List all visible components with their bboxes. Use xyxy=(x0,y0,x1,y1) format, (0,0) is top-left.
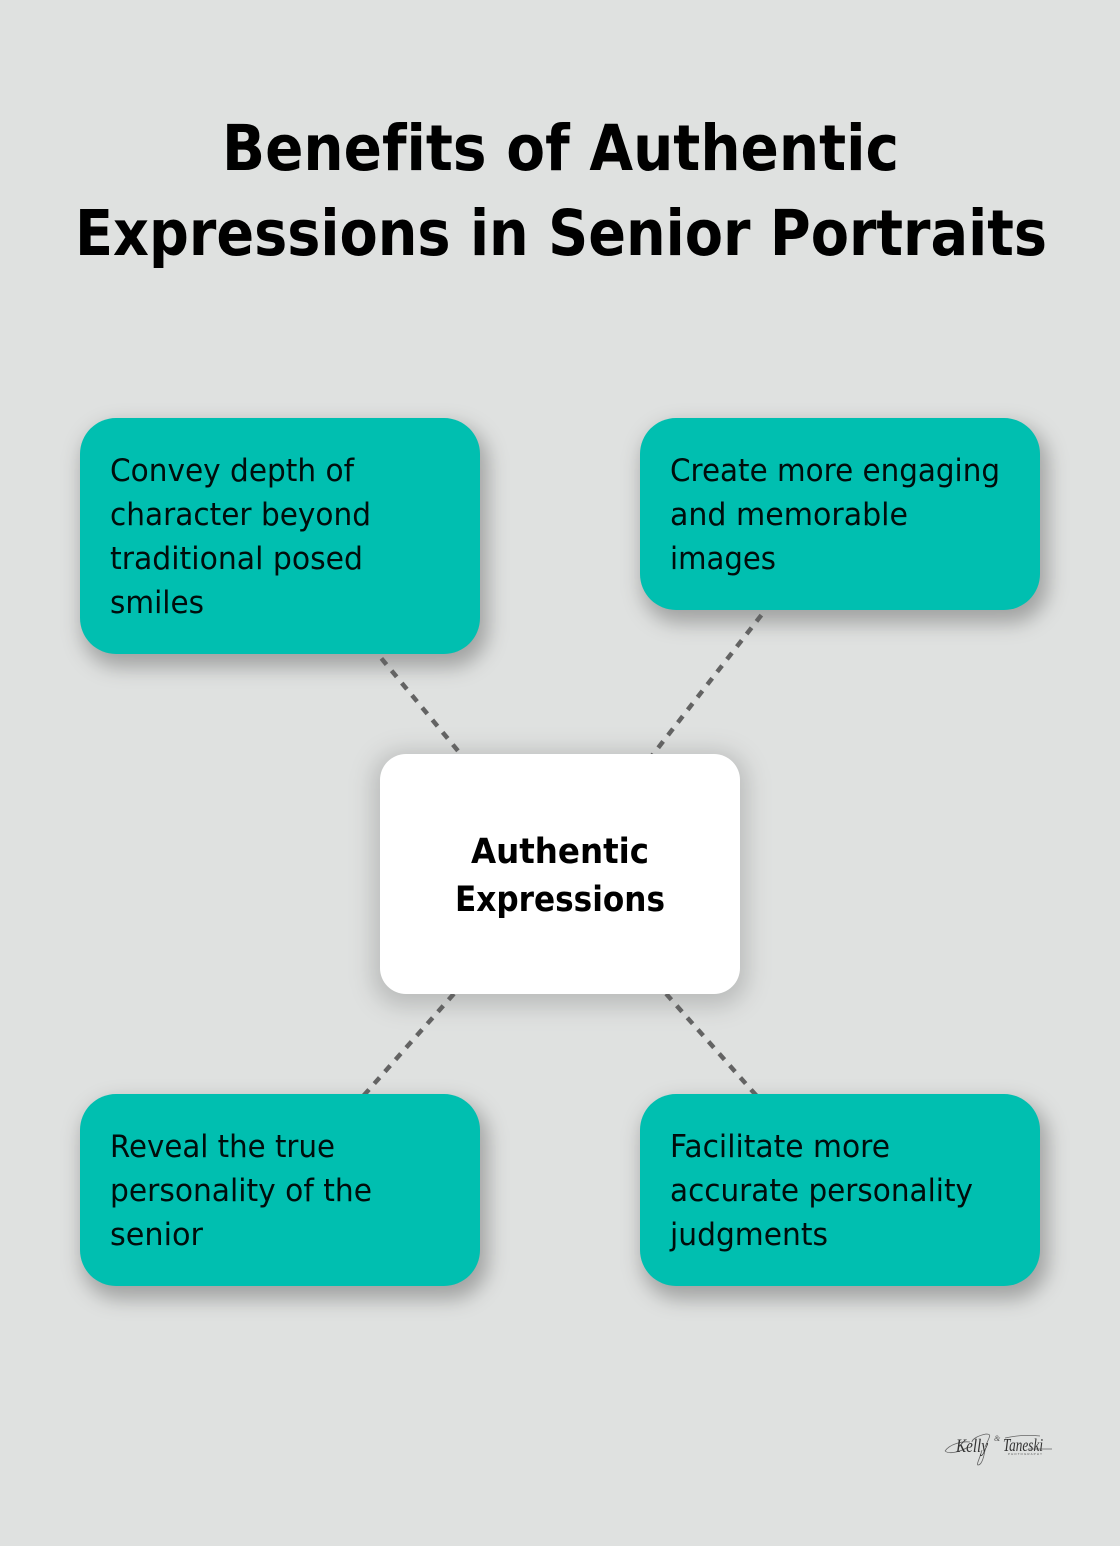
logo: signature: & xyxy=(994,1434,1001,1443)
panel: convey depth: traditional posed xyxy=(110,541,363,577)
box shadows xyxy=(82,425,1048,1299)
logo: signature: Kelly xyxy=(955,1436,988,1457)
logo: signature: Taneski xyxy=(1003,1435,1043,1455)
panel: convey depth xyxy=(80,418,480,654)
panel: engaging images xyxy=(640,418,1040,610)
panel: engaging images: Create more engaging xyxy=(670,453,1000,489)
panel: true personality: Reveal the true xyxy=(110,1129,335,1165)
panel: true personality: personality of the xyxy=(110,1173,372,1209)
panel: central concept: Expressions xyxy=(455,880,665,920)
panel: central concept: Authentic xyxy=(471,832,649,872)
panel: engaging images: and memorable xyxy=(670,497,908,533)
panel: accurate judgments xyxy=(640,1094,1040,1286)
dashed connectors xyxy=(280,514,840,1190)
panel: true personality xyxy=(80,1094,480,1286)
panel: accurate judgments: judgments xyxy=(669,1217,828,1253)
panel: accurate judgments: Facilitate more xyxy=(670,1129,890,1165)
panel: convey depth: character beyond xyxy=(110,497,371,533)
logo: signature xyxy=(945,1434,1052,1465)
title xyxy=(75,112,1047,270)
title: Benefits of Authentic xyxy=(222,112,899,185)
panel: true personality: senior xyxy=(110,1217,203,1253)
logo: signature: PHOTOGRAPHY xyxy=(1008,1452,1042,1456)
panel: engaging images: images xyxy=(670,541,776,577)
panel: convey depth: Convey depth of xyxy=(110,453,355,489)
panel: convey depth: smiles xyxy=(110,585,204,621)
panel: central concept xyxy=(380,754,740,994)
panel: accurate judgments: accurate personality xyxy=(670,1173,973,1209)
